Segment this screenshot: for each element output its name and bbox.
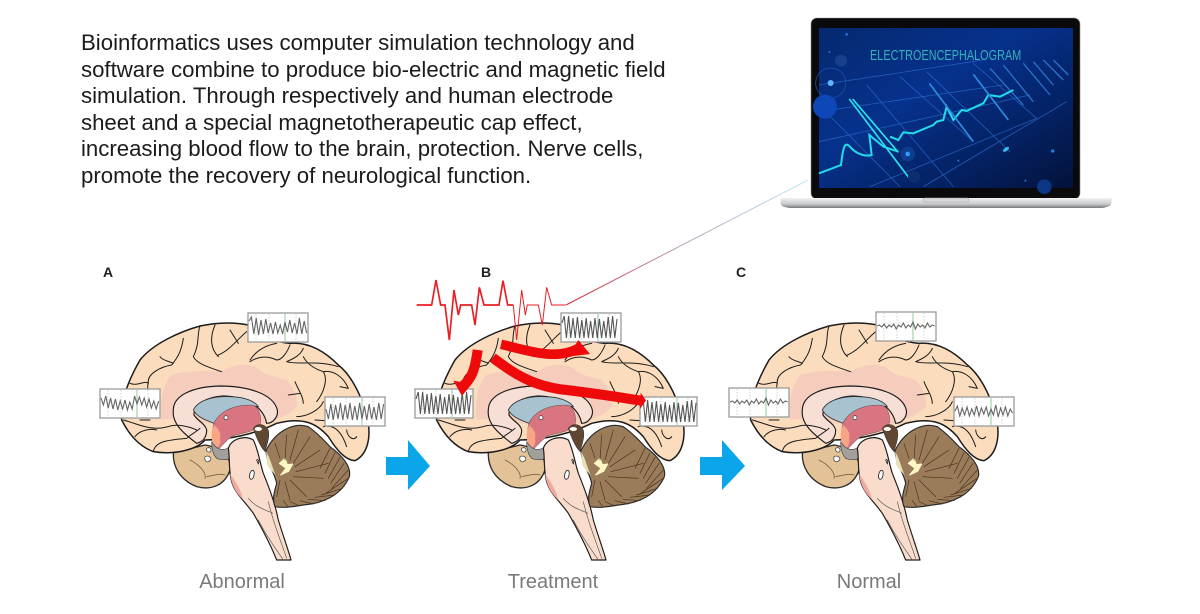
red ECG trace	[417, 280, 566, 340]
intro text block: software combine to produce bio-electric and magnetic field	[81, 57, 666, 82]
EEG box C left	[729, 388, 789, 417]
EEG box C top	[876, 312, 936, 341]
arrow: treatment to normal	[700, 440, 745, 490]
EEG box A left	[100, 389, 160, 418]
EEG box C right	[954, 397, 1014, 426]
caption: Treatment: Treatment	[508, 571, 598, 593]
panel letter C: C	[736, 264, 746, 280]
panel letter A: A	[103, 264, 113, 280]
EEG box B right	[640, 397, 697, 426]
panel B: treatment brain	[415, 280, 697, 560]
intro text block	[81, 30, 666, 188]
EEG box B left	[415, 389, 473, 418]
panel letter B: B	[481, 264, 491, 280]
EEG box A right	[325, 397, 385, 426]
intro text block: increasing blood flow to the brain, protection. Nerve cells,	[81, 136, 643, 161]
brain illustration A	[121, 323, 369, 560]
caption: Abnormal: Abnormal	[199, 571, 285, 593]
laptop base	[780, 198, 1112, 208]
intro text block: Bioinformatics uses computer simulation technology and	[81, 30, 635, 55]
laptop with electroencephalogram screen	[780, 18, 1112, 208]
intro text block: promote the recovery of neurological function.	[81, 163, 531, 188]
EEG box B top	[561, 313, 621, 342]
screen title: ELECTROENCEPHALOGRAM	[870, 46, 1021, 63]
arrow: abnormal to treatment	[386, 440, 430, 490]
laptop lid	[811, 18, 1080, 199]
brain illustration C	[750, 323, 998, 560]
EEG box A top	[248, 313, 308, 342]
brain illustration B	[436, 323, 684, 560]
intro text block: sheet and a special magnetotherapeutic cap effect,	[81, 110, 583, 135]
connector line from ECG to laptop	[566, 180, 808, 305]
panel C: normal brain	[729, 312, 1014, 560]
laptop screen	[813, 28, 1073, 194]
panel A: abnormal brain	[100, 313, 385, 560]
red arrows showing signal flow	[453, 340, 646, 409]
intro text block: simulation. Through respectively and human electrode	[81, 83, 613, 108]
caption: Normal: Normal	[837, 571, 901, 593]
